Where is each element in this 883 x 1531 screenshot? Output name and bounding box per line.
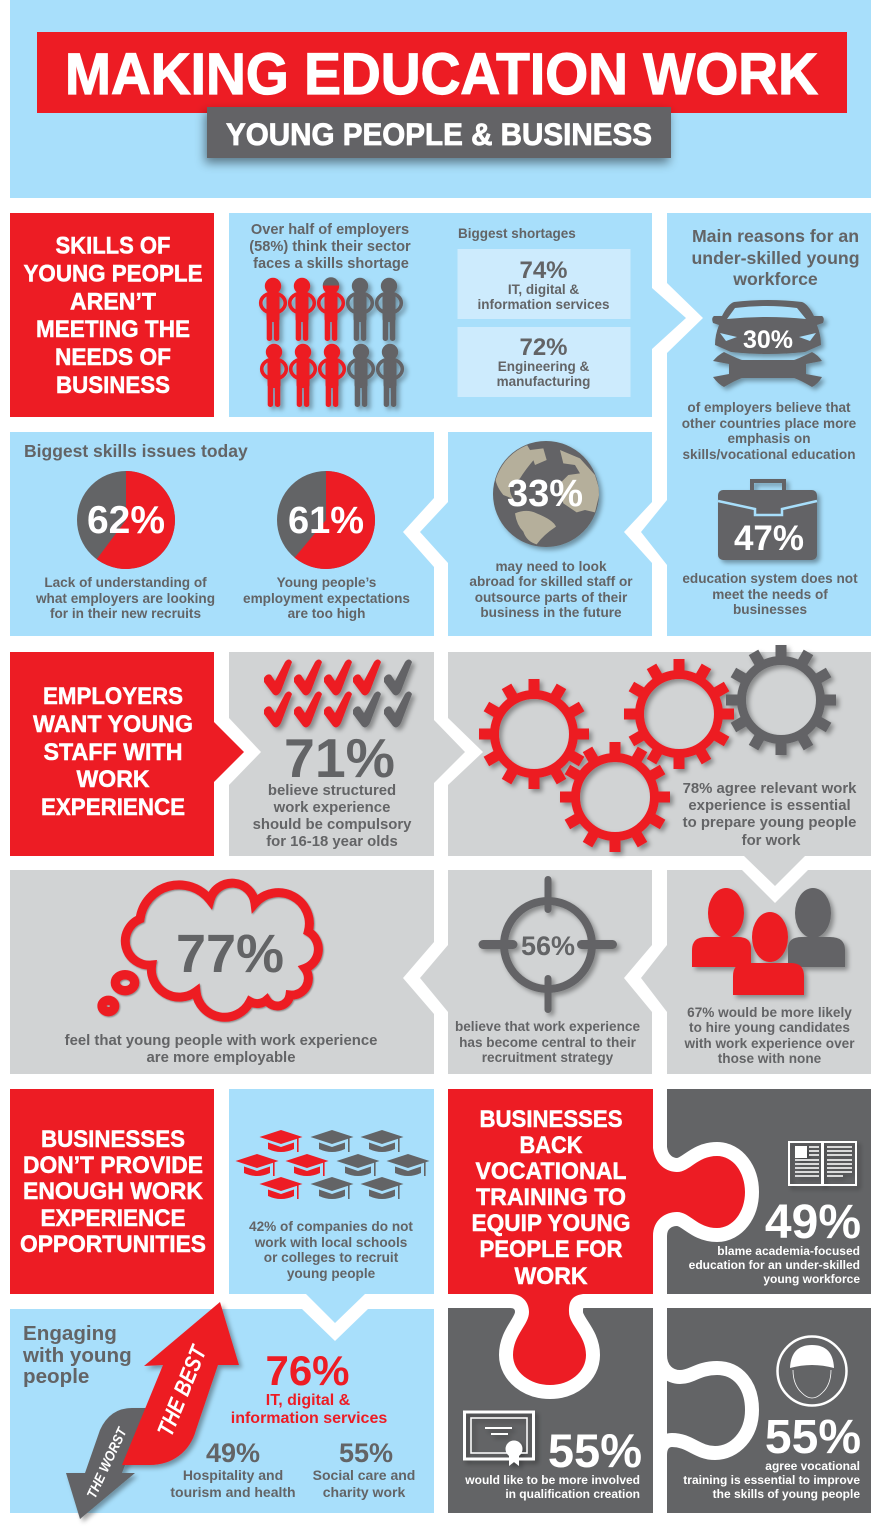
puzzle piece: red heading: EQUIP YOUNG: [472, 1210, 630, 1237]
text: biggest shortages: Biggest shortages: [458, 226, 576, 241]
icon: car and wrench: 30%: [743, 326, 793, 354]
icon: target 56%: 56%: [521, 931, 575, 961]
panel: 71% compulsory: [229, 652, 465, 856]
heading: main reasons: [691, 226, 860, 289]
text: 56% caption: recruitment strategy: [482, 1050, 614, 1065]
text: 71% caption: for 16-18 year olds: [266, 834, 398, 850]
subtitle: [207, 107, 671, 158]
stat: 55% qualification: in qualification creation: [505, 1487, 640, 1501]
pie chart: 61%: [277, 471, 375, 569]
stat: 55% social care: [313, 1438, 415, 1500]
text: 33% caption: business in the future: [480, 605, 622, 620]
panel: skills heading: MEETING THE: [36, 316, 190, 343]
panel: employers heading: STAFF WITH: [44, 739, 182, 766]
panel: title banner: [10, 0, 871, 198]
box: 74% IT: IT, digital &: [508, 282, 579, 297]
pie chart: 61%: 61%: [288, 500, 364, 542]
panel: engaging with young people: [10, 1302, 434, 1519]
heading: main reasons: under-skilled young: [691, 248, 860, 268]
stat: 55% qualification: 55%: [548, 1424, 642, 1477]
arrow: the best: [122, 1302, 239, 1465]
panel: employers heading: EMPLOYERS: [43, 683, 183, 710]
text: 33% caption: may need to look: [495, 559, 607, 574]
icon: globe 33%: [493, 441, 600, 547]
text: 67% caption: to hire young candidates: [689, 1020, 850, 1035]
text: 61% caption: Young people’s: [277, 575, 376, 590]
heading: main reasons: workforce: [732, 269, 818, 289]
stat: 55% social care: 55%: [339, 1438, 393, 1468]
text: 62% caption: what employers are looking: [35, 591, 215, 606]
text: 56% caption: has become central to their: [459, 1035, 637, 1050]
panel: skills heading: NEEDS OF: [55, 344, 171, 371]
text: 71% caption: [253, 783, 412, 850]
panel: 78% relevant experience: [448, 645, 871, 886]
text: 30% caption: other countries place more: [682, 416, 857, 431]
icon: graduation caps: [236, 1130, 430, 1199]
panel: vocational training puzzle: [448, 1089, 871, 1513]
panel: 33% abroad: [420, 432, 652, 636]
heading: engaging: with young: [22, 1344, 132, 1367]
text: 42% caption: or colleges to recruit: [264, 1250, 399, 1265]
text: 77% caption: are more employable: [147, 1050, 295, 1066]
arrow: the best: THE BEST: [152, 1341, 212, 1440]
puzzle piece: red heading: BACK: [520, 1132, 583, 1159]
number: 77%: 77%: [176, 924, 284, 984]
text: 47% caption: businesses: [733, 602, 807, 617]
icon: gears: [479, 645, 836, 852]
stat: 55% social care: charity work: [323, 1484, 405, 1500]
icon: thought cloud: [102, 883, 318, 1017]
panel: skills heading: YOUNG PEOPLE: [24, 260, 202, 288]
pie chart: 62%: [77, 471, 175, 569]
stat: 76% IT: information services: [231, 1410, 387, 1427]
panel: skills heading: SKILLS OF: [56, 232, 171, 260]
box: 74% IT: information services: [477, 297, 610, 312]
panel: skills heading: AREN’T: [70, 288, 156, 316]
text: 71% caption: should be compulsory: [253, 817, 412, 833]
text: 78% caption: [683, 781, 857, 849]
stat: 55% vocational: 55%: [765, 1411, 861, 1464]
text: 47% caption: meet the needs of: [712, 587, 828, 602]
text: 47% caption: [682, 571, 858, 617]
icon: certificate: [464, 1412, 534, 1466]
panel: 56% recruitment: [420, 870, 652, 1074]
box: 72% engineering: 72%: [519, 334, 568, 361]
stat: 49% academia: young workforce: [763, 1272, 860, 1286]
puzzle divider: [660, 1308, 752, 1513]
box: 72% engineering: [458, 327, 630, 397]
icon: target 56%: [478, 876, 617, 1013]
stat: 55% vocational: the skills of young people: [713, 1487, 860, 1501]
heading: engaging: people: [23, 1365, 89, 1388]
panel: businesses heading: BUSINESSES: [41, 1126, 185, 1153]
text: skills shortage: Over half of employers: [251, 222, 409, 238]
subtitle: YOUNG PEOPLE & BUSINESS: [226, 116, 652, 152]
text: 47% caption: education system does not: [682, 571, 858, 586]
stat: 55% social care: Social care and: [313, 1467, 415, 1483]
stat: 76% IT: [231, 1347, 387, 1427]
panel: businesses heading: ENOUGH WORK: [23, 1178, 203, 1205]
text: 42% caption: young people: [287, 1266, 376, 1281]
number: 71%: 71%: [284, 727, 395, 789]
stat: 49% academia: education for an under-skilled: [689, 1258, 860, 1272]
panel: employers heading: WORK: [76, 766, 150, 793]
text: 62% caption: [35, 575, 215, 621]
icon: briefcase: 47%: [734, 519, 804, 558]
panel: businesses heading: [10, 1089, 214, 1294]
text: 71% caption: believe structured: [268, 783, 396, 799]
text: 62% caption: for in their new recruits: [50, 606, 201, 621]
puzzle piece: red heading: TRAINING TO: [476, 1184, 626, 1211]
text: 42% caption: work with local schools: [254, 1235, 407, 1250]
text: 30% caption: emphasis on: [727, 431, 811, 446]
panel: skills heading: [10, 213, 214, 417]
pie chart: 62%: 62%: [87, 499, 165, 542]
text: 61% caption: employment expectations: [243, 591, 410, 606]
stat: 55% qualification: [464, 1424, 642, 1501]
text: 42% caption: 42% of companies do not: [249, 1219, 413, 1234]
text: 78% caption: 78% agree relevant work: [683, 781, 857, 797]
text: 33% caption: [469, 559, 633, 620]
text: 56% caption: believe that work experience: [455, 1019, 640, 1034]
stat: 49% academia: 49%: [765, 1196, 861, 1249]
box: 72% engineering: manufacturing: [497, 374, 590, 389]
panel: skills heading: BUSINESS: [56, 372, 170, 399]
text: 67% caption: those with none: [718, 1051, 822, 1066]
text: 78% caption: for work: [742, 833, 801, 849]
text: skills shortage: (58%) think their sector: [249, 239, 411, 255]
stat: 55% vocational: [683, 1411, 861, 1501]
text: 61% caption: are too high: [288, 606, 365, 621]
text: skills shortage: [249, 222, 411, 272]
stat: 55% vocational: training is essential to improve: [683, 1473, 860, 1487]
puzzle piece: red heading: VOCATIONAL: [476, 1158, 627, 1185]
text: 33% caption: abroad for skilled staff or: [469, 574, 633, 589]
panel: 67% more likely to hire: [641, 870, 871, 1074]
text: 56% caption: [455, 1019, 640, 1065]
text: 30% caption: skills/vocational education: [682, 447, 856, 462]
stat: 49% hospitality: tourism and health: [170, 1484, 296, 1500]
heading: engaging: [22, 1322, 132, 1388]
heading: engaging: Engaging: [23, 1322, 117, 1345]
stat: 76% IT: 76%: [265, 1347, 350, 1394]
icon: people pictogram 58%: [261, 277, 402, 407]
text: 30% caption: of employers believe that: [687, 400, 851, 415]
icon: open book: [789, 1142, 856, 1185]
puzzle piece: red heading: [448, 1089, 745, 1385]
panel: biggest skills issues: [10, 432, 434, 636]
icon: three people: [692, 888, 845, 995]
title: MAKING EDUCATION WORK: [65, 42, 818, 107]
panel: 77% employable: [10, 870, 434, 1074]
panel: businesses heading: EXPERIENCE: [40, 1205, 186, 1232]
stat: 55% qualification: would like to be more involved: [464, 1473, 640, 1487]
arrow: the worst: THE WORST: [83, 1424, 130, 1501]
text: 33% caption: outsource parts of their: [475, 590, 628, 605]
icon: briefcase: [718, 481, 817, 560]
heading: biggest skills issues: Biggest skills issues today: [24, 441, 248, 461]
text: skills shortage: faces a skills shortage: [253, 256, 409, 272]
text: 78% caption: experience is essential: [688, 798, 851, 814]
text: 42% caption: [249, 1219, 413, 1281]
text: 67% caption: 67% would be more likely: [687, 1005, 852, 1020]
puzzle piece: red heading: BUSINESSES: [480, 1106, 622, 1133]
box: 72% engineering: Engineering &: [498, 359, 590, 374]
panel: employers heading: EXPERIENCE: [41, 794, 185, 821]
text: 62% caption: Lack of understanding of: [44, 575, 207, 590]
panel: employers heading: WANT YOUNG: [33, 711, 193, 738]
stat: 76% IT: IT, digital &: [266, 1392, 351, 1409]
puzzle piece: red heading: PEOPLE FOR: [480, 1236, 623, 1263]
panel: businesses heading: OPPORTUNITIES: [20, 1231, 206, 1258]
text: 77% caption: feel that young people with work experience: [65, 1033, 377, 1049]
text: 71% caption: work experience: [273, 800, 390, 816]
text: 78% caption: to prepare young people: [683, 815, 856, 831]
panel: main reasons: [641, 213, 871, 636]
stat: 49% academia: [689, 1196, 861, 1286]
text: 61% caption: [243, 575, 410, 621]
text: 67% caption: [684, 1005, 855, 1066]
text: 67% caption: with work experience over: [684, 1036, 855, 1051]
text: 30% caption: [682, 400, 857, 462]
box: 74% IT: [458, 249, 630, 319]
stat: 49% hospitality: [170, 1438, 296, 1500]
panel: skills shortage: [229, 213, 686, 417]
arrow: the worst: [66, 1408, 147, 1519]
icon: globe 33%: 33%: [507, 473, 583, 515]
icon: car and wrench: [712, 300, 824, 387]
stat: 49% academia: blame academia-focused: [717, 1244, 860, 1258]
box: 74% IT: 74%: [519, 257, 568, 284]
panel: employers heading: [10, 652, 244, 856]
stat: 49% hospitality: Hospitality and: [183, 1467, 283, 1483]
heading: main reasons: Main reasons for an: [692, 226, 859, 246]
stat: 55% vocational: agree vocational: [765, 1459, 860, 1473]
stat: 49% hospitality: 49%: [206, 1438, 260, 1468]
text: 77% caption: [65, 1033, 377, 1066]
panel: businesses heading: DON’T PROVIDE: [23, 1152, 203, 1179]
puzzle piece: red heading: WORK: [514, 1263, 588, 1290]
panel: 42% schools: [229, 1089, 434, 1323]
icon: tick marks: [264, 660, 412, 727]
icon: hard hat: [778, 1336, 846, 1406]
